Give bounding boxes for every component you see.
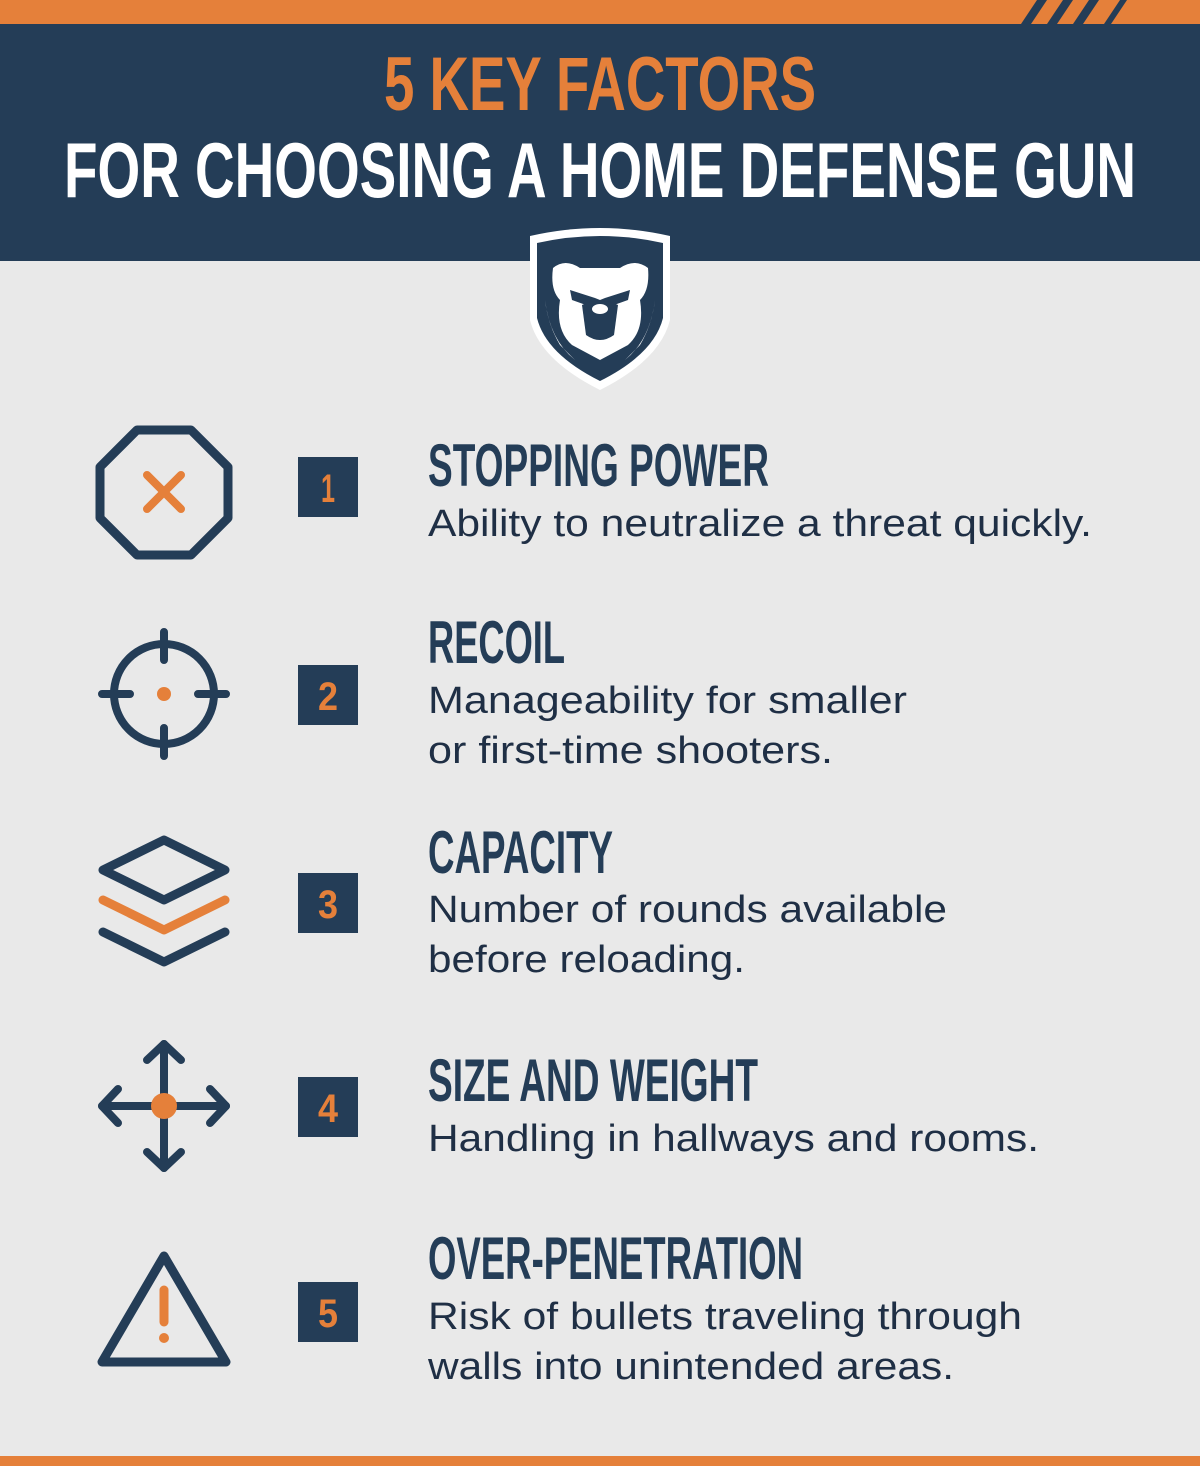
number 2: 2 xyxy=(318,675,338,719)
item 4: size and weight xyxy=(102,1044,1039,1168)
text 3: CAPACITY xyxy=(428,819,613,886)
number 4 xyxy=(298,1077,358,1137)
item 1: stopping power xyxy=(100,430,1092,555)
number 4: 4 xyxy=(318,1087,339,1131)
item 2: recoil xyxy=(102,609,907,772)
icon: crosshair xyxy=(102,632,226,756)
text 3 xyxy=(428,819,947,981)
text 2: or first-time shooters. xyxy=(428,730,833,772)
number 2 xyxy=(298,665,358,725)
text 5 xyxy=(427,1225,1022,1388)
number 3 xyxy=(298,873,358,933)
text 2 xyxy=(428,609,907,772)
text 1: STOPPING POWER xyxy=(428,432,769,499)
text 1: Ability to neutralize a threat quickly. xyxy=(428,503,1092,545)
text 2: RECOIL xyxy=(428,609,565,676)
icon: warning triangle xyxy=(102,1256,226,1362)
text 5: Risk of bullets traveling through xyxy=(428,1296,1022,1338)
text 3: before reloading. xyxy=(428,939,745,981)
text 4 xyxy=(428,1047,1039,1160)
item 3: capacity xyxy=(103,819,947,981)
text 2: Manageability for smaller xyxy=(428,680,907,722)
header band xyxy=(0,24,1200,261)
title xyxy=(64,42,1136,214)
text 5: OVER-PENETRATION xyxy=(428,1225,803,1292)
top orange bar xyxy=(0,0,1200,24)
title: 5 KEY FACTORS xyxy=(384,42,816,127)
number 3: 3 xyxy=(318,883,338,927)
text 1 xyxy=(428,432,1092,545)
number 1 xyxy=(298,457,358,517)
icon: move arrows xyxy=(102,1044,226,1168)
icon: layers xyxy=(103,840,225,962)
number 5 xyxy=(298,1282,358,1342)
bottom orange bar xyxy=(0,1456,1200,1466)
text 4: Handling in hallways and rooms. xyxy=(428,1118,1039,1160)
icon: octagon x xyxy=(100,430,228,555)
logo: bear shield xyxy=(530,228,670,390)
number 1: 1 xyxy=(321,467,335,511)
text 5: walls into unintended areas. xyxy=(427,1346,954,1388)
text 3: Number of rounds available xyxy=(428,889,947,931)
number 5: 5 xyxy=(318,1292,338,1336)
text 4: SIZE AND WEIGHT xyxy=(428,1047,758,1114)
item 5: over-penetration xyxy=(102,1225,1022,1388)
